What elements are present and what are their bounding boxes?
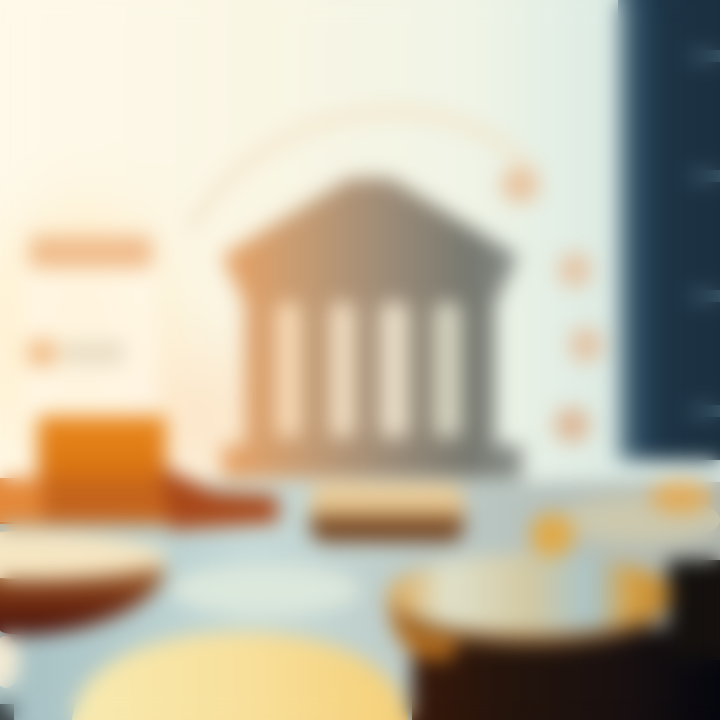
orange jar: [0, 416, 278, 530]
bank body: [245, 290, 495, 455]
bank base: [222, 445, 522, 479]
arc around bank: [190, 112, 530, 230]
arc markers: [501, 167, 603, 443]
bottom left coin edge: [0, 636, 20, 720]
center bowl: [310, 484, 464, 542]
right bowl: [388, 554, 672, 646]
dark building panel: [618, 0, 720, 460]
bottom right dark floor: [388, 560, 720, 720]
left bowl: [0, 531, 168, 635]
bank: [222, 178, 522, 479]
right coins: [530, 480, 710, 557]
table surface: [0, 482, 720, 720]
bank column gaps: [276, 302, 301, 438]
bank roof: [222, 178, 518, 304]
left label card: [22, 236, 157, 420]
bottom gold coin: [72, 632, 408, 720]
